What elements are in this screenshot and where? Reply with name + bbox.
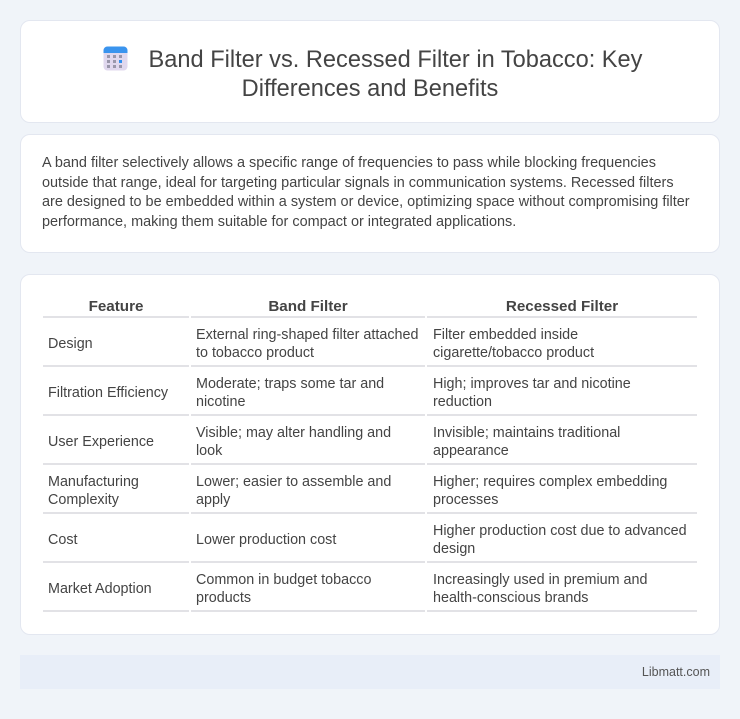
footer text: Libmatt.com <box>642 665 710 679</box>
row: cost: Cost <box>48 532 78 548</box>
table header <box>43 298 697 318</box>
table header: Recessed Filter <box>506 298 618 315</box>
row: cost <box>43 523 697 563</box>
row: market adoption: Market Adoption <box>48 581 152 597</box>
intro text: performance, making them suitable for compact or integrated applications. <box>42 214 516 230</box>
row: market adoption <box>43 572 697 612</box>
row: manufacturing complexity: processes <box>433 492 498 508</box>
row: manufacturing complexity: Complexity <box>48 492 119 508</box>
footer bar <box>20 655 720 689</box>
table header: Band Filter <box>268 298 348 315</box>
row: design: External ring-shaped filter attached <box>196 327 418 343</box>
row: manufacturing complexity: Manufacturing <box>48 474 139 490</box>
row: market adoption: health-conscious brands <box>433 590 588 606</box>
title: Band Filter vs. Recessed Filter in Tobacco: Key <box>149 47 642 73</box>
intro text <box>42 155 690 230</box>
row: user experience: Invisible; maintains traditional <box>433 425 620 441</box>
row: user experience: appearance <box>433 443 509 459</box>
comparison table <box>43 298 697 612</box>
row: cost: Lower production cost <box>196 532 336 548</box>
row: filtration efficiency: nicotine <box>196 394 245 410</box>
row: market adoption: Common in budget tobacco <box>196 572 371 588</box>
row: market adoption: products <box>196 590 251 606</box>
table rows <box>43 327 697 612</box>
table card <box>20 274 720 635</box>
row: manufacturing complexity: Higher; requires complex embedding <box>433 474 667 490</box>
row: user experience: Visible; may alter handling and <box>196 425 391 441</box>
row: filtration efficiency: Moderate; traps some tar and <box>196 376 384 392</box>
row: user experience <box>43 425 697 465</box>
title <box>149 47 642 102</box>
row: manufacturing complexity: apply <box>196 492 230 508</box>
row: cost: design <box>433 541 475 557</box>
row: user experience: User Experience <box>48 434 154 450</box>
row: filtration efficiency: Filtration Efficiency <box>48 385 168 401</box>
row: user experience: look <box>196 443 222 459</box>
row: design: Filter embedded inside <box>433 327 578 343</box>
row: design: to tobacco product <box>196 345 314 361</box>
title: Differences and Benefits <box>242 76 498 102</box>
row: filtration efficiency: reduction <box>433 394 492 410</box>
intro text: A band filter selectively allows a specific range of frequencies to pass while blocking frequencies <box>42 155 656 171</box>
intro card <box>20 134 720 253</box>
row: manufacturing complexity: Lower; easier to assemble and <box>196 474 391 490</box>
row: design: Design <box>48 336 93 352</box>
icon: calendar <box>104 46 128 70</box>
row: filtration efficiency <box>43 376 697 416</box>
header card <box>20 20 720 123</box>
row: manufacturing complexity <box>43 474 697 514</box>
row: cost: Higher production cost due to advanced <box>433 523 687 539</box>
row: design: cigarette/tobacco product <box>433 345 594 361</box>
intro text: are designed to be embedded within a system or device, optimizing space without compromising filter <box>42 194 690 210</box>
intro text: outside that range, ideal for targeting particular signals in communication systems. Recessed filters <box>42 174 674 190</box>
row: filtration efficiency: High; improves tar and nicotine <box>433 376 631 392</box>
table header: Feature <box>89 298 143 315</box>
row: design <box>43 327 697 367</box>
row: market adoption: Increasingly used in premium and <box>433 572 647 588</box>
